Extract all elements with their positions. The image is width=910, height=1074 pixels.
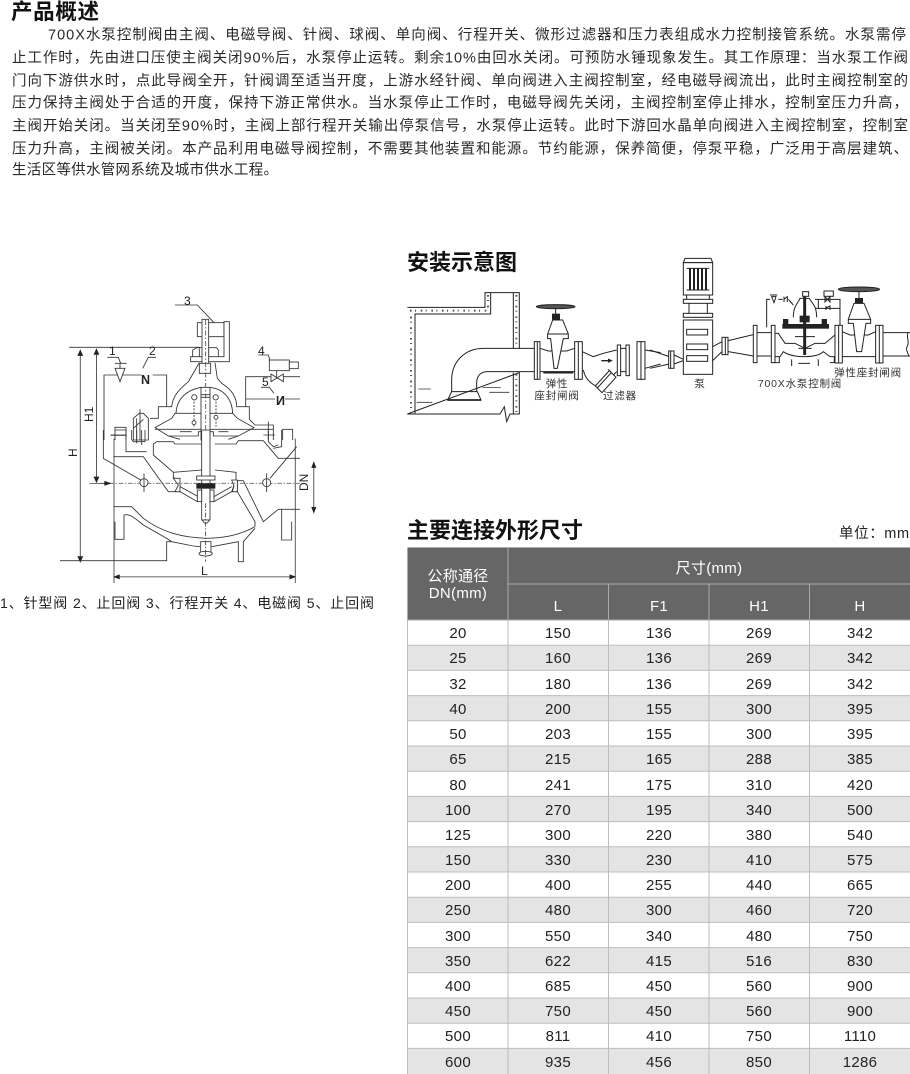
- dimension labels: 3: [184, 294, 191, 308]
- table body values: 32: [449, 676, 467, 693]
- text block: product description: 生活区等供水管网系统及城市供水工程。: [12, 160, 278, 178]
- table body values: 450: [445, 1003, 471, 1020]
- diagram: valve cross-section with dimensions: [60, 305, 316, 583]
- table header: 公称通径: [427, 568, 489, 585]
- outlet gate valve and pipe: [835, 287, 910, 363]
- table body values: 420: [847, 777, 873, 794]
- table body values: 220: [646, 827, 672, 844]
- table body values: 300: [545, 827, 571, 844]
- table body values: 415: [646, 953, 672, 970]
- table header: [408, 548, 910, 620]
- diagram labels: 700X水泵控制阀: [758, 377, 842, 390]
- table: dimensions: [408, 548, 910, 1074]
- caption: valve parts legend: 1、针型阀 2、止回阀 3、行程开关 4、电磁阀 5、止回阀: [0, 595, 374, 611]
- table body values: 250: [445, 902, 471, 919]
- table body values: 395: [847, 701, 873, 718]
- dimension labels: DN: [297, 474, 311, 491]
- diagram: installation left (tank, gate valve, filter): [407, 293, 661, 422]
- stem and disc: [173, 430, 237, 556]
- travel switch: [191, 319, 229, 373]
- table body values: 550: [545, 928, 571, 945]
- control pipework right with solenoid and check valve: [246, 355, 300, 407]
- table body values: 195: [646, 802, 672, 819]
- table body values: 136: [646, 625, 672, 642]
- control pipework left with needle valve: [104, 357, 167, 440]
- table body values: 310: [746, 777, 772, 794]
- dimension labels: H: [66, 448, 80, 457]
- text block: product description: 700X水泵控制阀由主阀、电磁导阀、针阀、球阀、单向阀、行程开关、微形过滤器和压力表组成水力控制接管系统。水泵需停: [48, 26, 906, 44]
- outlet cone: [713, 325, 772, 363]
- left flange bolts: [111, 409, 293, 440]
- table body values: 665: [847, 877, 873, 894]
- table body values: 342: [847, 650, 873, 667]
- table body values: 380: [746, 827, 772, 844]
- table body values: 100: [445, 802, 471, 819]
- dimension labels: 2: [149, 344, 156, 358]
- table body values: 395: [847, 726, 873, 743]
- diagram labels: 弹性: [546, 377, 568, 390]
- table body values: 65: [449, 751, 467, 768]
- suction pipe: [448, 348, 534, 400]
- table body values: 540: [847, 827, 873, 844]
- table body values: 330: [545, 852, 571, 869]
- table body values: 50: [449, 726, 467, 743]
- table body values: 230: [646, 852, 672, 869]
- table body values: 340: [746, 802, 772, 819]
- dimension labels: 4: [258, 344, 265, 358]
- diagram: installation right (pump, control valve, gate valve): [650, 258, 910, 374]
- control tubing: [767, 299, 840, 327]
- table body values: 456: [646, 1054, 672, 1071]
- gate valve: [534, 305, 582, 379]
- table body values: 560: [746, 1003, 772, 1020]
- table header: H1: [749, 598, 769, 615]
- diagram labels: 泵: [694, 378, 706, 390]
- centre line with flow arrow: [89, 481, 300, 562]
- table body values: 340: [646, 928, 672, 945]
- table body values: 410: [646, 1028, 672, 1045]
- table body values: 410: [746, 852, 772, 869]
- table body values: 269: [746, 650, 772, 667]
- table body values: 269: [746, 676, 772, 693]
- table body values: 215: [545, 751, 571, 768]
- table body values: 400: [545, 877, 571, 894]
- bonnet and dome: [150, 363, 273, 440]
- bypass ports: [140, 473, 271, 492]
- table body values: 150: [445, 852, 471, 869]
- heading: product overview: 产品概述: [11, 0, 99, 24]
- dimension labels: [66, 294, 311, 578]
- table body values: 155: [646, 726, 672, 743]
- table body values: 40: [449, 701, 467, 718]
- table body values: 560: [746, 978, 772, 995]
- table header: H: [854, 598, 866, 615]
- table body values: 300: [646, 902, 672, 919]
- text block: product description: 止工作时，先由进口压使主阀关闭90%后，水泵停止运转。剩余10%由回水关闭。可预防水锤现象发生。其工作原理：当水泵工作阀: [12, 48, 908, 66]
- table body values: 1286: [843, 1054, 877, 1071]
- table body values: 155: [646, 701, 672, 718]
- reducer flange: [637, 342, 661, 379]
- inlet reducer: [650, 350, 683, 368]
- table header: F1: [650, 598, 668, 615]
- table body values: 450: [646, 1003, 672, 1020]
- table body values: 685: [545, 978, 571, 995]
- table body values: 811: [546, 1028, 570, 1045]
- table body values: 750: [545, 1003, 571, 1020]
- table body values: 255: [646, 877, 672, 894]
- table body values: 165: [646, 751, 672, 768]
- table body values: 900: [847, 978, 873, 995]
- table body values: 80: [449, 777, 467, 794]
- table body values: 20: [449, 625, 467, 642]
- table body values: 750: [847, 928, 873, 945]
- table body values: 935: [545, 1054, 571, 1071]
- table body values: 450: [646, 978, 672, 995]
- dimension labels: N: [276, 394, 285, 408]
- table body values: [445, 625, 877, 1071]
- table body values: 720: [847, 902, 873, 919]
- table body values: 830: [847, 953, 873, 970]
- dimension lines: [78, 349, 316, 583]
- diagram labels: 过滤器: [603, 389, 637, 402]
- diagram labels: 座封闸阀: [534, 389, 580, 402]
- table body values: 350: [445, 953, 471, 970]
- table body values: 575: [847, 852, 873, 869]
- body castings: [60, 430, 300, 562]
- heading: main connection dimensions: 主要连接外形尺寸: [407, 518, 583, 543]
- stem centre line upper: [205, 320, 207, 430]
- text block: product description: [12, 26, 908, 178]
- table body values: 269: [746, 625, 772, 642]
- table body values: 460: [746, 902, 772, 919]
- table body values: 516: [746, 953, 772, 970]
- table body values: 400: [445, 978, 471, 995]
- table body values: 150: [545, 625, 571, 642]
- dimension labels: 5: [262, 375, 269, 389]
- text block: product description: 压力升高，主阀被关闭。本产品利用电磁导阀控制，不需要其他装置和能源。节约能源，保养简便，停泵平稳，广泛用于高层建筑、: [12, 140, 908, 158]
- control valve: [767, 291, 840, 366]
- table body values: 342: [847, 676, 873, 693]
- table body values: 385: [847, 751, 873, 768]
- table body values: 500: [445, 1028, 471, 1045]
- dimension labels: L: [201, 564, 208, 578]
- table body values: 600: [445, 1054, 471, 1071]
- table body values: 500: [847, 802, 873, 819]
- table body values: 136: [646, 676, 672, 693]
- table body values: 200: [545, 701, 571, 718]
- text block: product description: 压力保持主阀处于合适的开度，保持下游正常供水。当水泵停止工作时，电磁导阀先关闭，主阀控制室停止排水，控制室压力升高，: [12, 94, 908, 112]
- dimension labels: 1: [109, 344, 116, 358]
- table body values: 480: [545, 902, 571, 919]
- table header: 尺寸(mm): [676, 560, 742, 577]
- table body values: 900: [847, 1003, 873, 1020]
- table body values: 203: [545, 726, 571, 743]
- table body values: 750: [746, 1028, 772, 1045]
- water tank: [407, 293, 519, 422]
- table body values: 125: [445, 827, 471, 844]
- table body values: 300: [746, 726, 772, 743]
- unit label: 单位：mm: [839, 525, 910, 542]
- valve lower part: body, disc, seats: [60, 430, 300, 562]
- dimension labels: N: [141, 373, 150, 387]
- table body values: 622: [545, 953, 571, 970]
- table striped rows: [408, 645, 910, 1074]
- Y filter: [582, 345, 629, 393]
- table body values: 480: [746, 928, 772, 945]
- heading: installation diagram: 安装示意图: [407, 250, 517, 275]
- table body values: 136: [646, 650, 672, 667]
- table body values: 342: [847, 625, 873, 642]
- table body values: 850: [746, 1054, 772, 1071]
- table body values: 1110: [844, 1028, 876, 1045]
- table body values: 25: [449, 650, 467, 667]
- dimension labels: H1: [82, 406, 96, 422]
- table body values: 241: [545, 777, 571, 794]
- valve upper part: bonnet, switch, control lines: [69, 305, 300, 440]
- table header: L: [554, 598, 562, 615]
- table body values: 180: [545, 676, 571, 693]
- table body values: 440: [746, 877, 772, 894]
- table body values: 288: [746, 751, 772, 768]
- table body values: 300: [746, 701, 772, 718]
- text block: product description: 门向下游供水时，点此导阀全开，针阀调至适当开度，上游水经针阀、单向阀进入主阀控制室，经电磁导阀流出，此时主阀控制室的: [12, 72, 908, 90]
- table body values: 175: [646, 777, 672, 794]
- pump: [683, 258, 713, 374]
- table body values: 200: [445, 877, 471, 894]
- diagram labels: 弹性座封闸阀: [834, 366, 902, 379]
- table body values: 300: [445, 928, 471, 945]
- text block: product description: 主阀开始关闭。当关闭至90%时，主阀上部行程开关输出停泵信号，水泵停止运转。此时下游回水晶单向阀进入主阀控制室，控制室: [12, 118, 908, 134]
- diagram labels: [534, 366, 902, 402]
- table header: DN(mm): [429, 585, 487, 602]
- table body values: 160: [545, 650, 571, 667]
- table body values: 270: [545, 802, 571, 819]
